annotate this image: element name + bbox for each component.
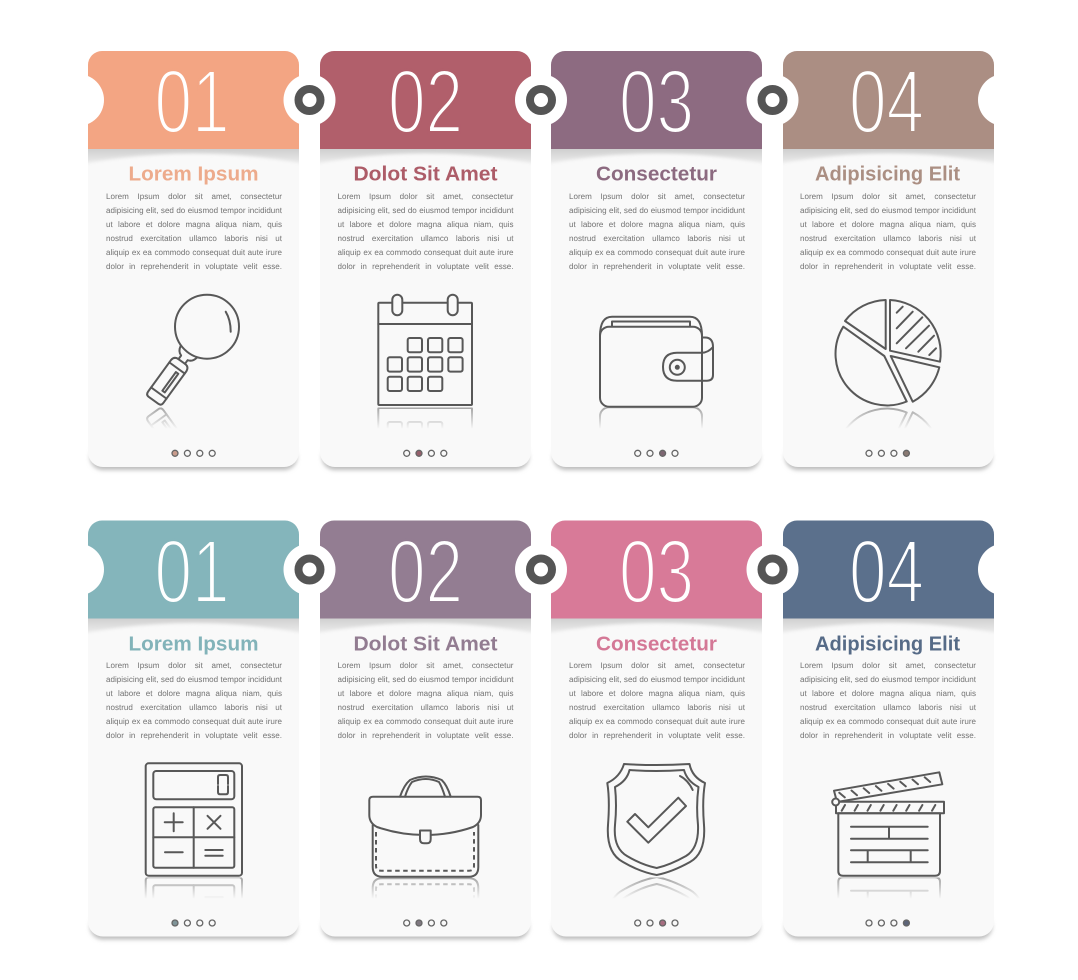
body text: dolor in reprehenderit in voluptate velit esse. bbox=[800, 731, 976, 740]
body text: adipisicing elit, sed do eiusmod tempor incididunt bbox=[106, 206, 282, 215]
icon: clapperboard bbox=[832, 772, 944, 876]
body text bbox=[106, 190, 282, 280]
body text: ut labore et dolore magna aliqua niam, quis bbox=[106, 220, 282, 229]
body text: Lorem Ipsum dolor sit amet, consectetur bbox=[338, 192, 514, 200]
header band 02 bbox=[320, 520, 531, 618]
body text: dolor in reprehenderit in voluptate velit esse. bbox=[569, 731, 745, 740]
body text: dolor in reprehenderit in voluptate velit esse. bbox=[338, 731, 514, 740]
connectors: top row rings and notches bbox=[52, 74, 1030, 126]
body text: adipisicing elit, sed do eiusmod tempor incididunt bbox=[800, 675, 976, 684]
pagination dots 03 bbox=[635, 920, 678, 926]
body text bbox=[106, 659, 282, 749]
body text: adipisicing elit, sed do eiusmod tempor incididunt bbox=[569, 206, 745, 215]
panel: card 04 Adipisicing Elit bbox=[783, 51, 994, 472]
body text bbox=[800, 190, 976, 280]
icon reflection: shield bbox=[614, 878, 698, 897]
body text: nostrud exercitation ullamco laboris nisi ut bbox=[106, 234, 282, 243]
number 02: 02 bbox=[388, 51, 463, 152]
panel: card 02 Dolot Sit Amet bbox=[320, 51, 531, 472]
body text: aliquip ex ea commodo consequat duit aute irure bbox=[800, 248, 976, 257]
connectors: bottom row rings and notches bbox=[52, 544, 1030, 596]
body text: ut labore et dolore magna aliqua niam, quis bbox=[569, 689, 745, 698]
body text: ut labore et dolore magna aliqua niam, quis bbox=[106, 689, 282, 698]
panel: card 03 Consectetur, lower row bbox=[551, 520, 762, 942]
body text: Lorem Ipsum dolor sit amet, consectetur bbox=[800, 661, 976, 670]
icon reflection: pie chart bbox=[846, 408, 931, 427]
header band 04 bbox=[783, 520, 994, 618]
heading: Adipisicing Elit: Adipisicing Elit bbox=[815, 634, 960, 656]
body text: nostrud exercitation ullamco laboris nisi ut bbox=[338, 234, 514, 243]
header band 03 bbox=[551, 520, 762, 618]
body text: dolor in reprehenderit in voluptate velit esse. bbox=[106, 731, 282, 740]
body text: dolor in reprehenderit in voluptate velit esse. bbox=[800, 262, 976, 271]
heading: Consectetur: Consectetur bbox=[596, 164, 717, 186]
body text: ut labore et dolore magna aliqua niam, quis bbox=[800, 220, 976, 229]
body text: dolor in reprehenderit in voluptate velit esse. bbox=[569, 262, 745, 271]
icon reflection: wallet bbox=[599, 408, 703, 427]
body text: ut labore et dolore magna aliqua niam, quis bbox=[338, 689, 514, 698]
body text: adipisicing elit, sed do eiusmod tempor incididunt bbox=[800, 206, 976, 215]
icon: briefcase bbox=[369, 776, 481, 877]
number 03: 03 bbox=[619, 521, 694, 622]
number 04: 04 bbox=[849, 51, 924, 152]
panel: card 03 Consectetur bbox=[551, 51, 762, 472]
body text: aliquip ex ea commodo consequat duit aute irure bbox=[106, 248, 282, 257]
number 01: 01 bbox=[154, 521, 230, 622]
body text: adipisicing elit, sed do eiusmod tempor incididunt bbox=[338, 675, 514, 684]
icon reflection: clapperboard bbox=[837, 878, 941, 897]
body text bbox=[800, 659, 976, 749]
icon reflection: briefcase bbox=[372, 878, 480, 897]
icon reflection: calendar bbox=[377, 408, 473, 427]
pagination dots 04 bbox=[866, 920, 909, 926]
body text: aliquip ex ea commodo consequat duit aute irure bbox=[569, 248, 745, 257]
panel: card 02 Dolot Sit Amet, lower row bbox=[320, 520, 531, 942]
body text: nostrud exercitation ullamco laboris nisi ut bbox=[800, 234, 976, 243]
body text: Lorem Ipsum dolor sit amet, consectetur bbox=[569, 661, 745, 670]
pagination dots 02 bbox=[404, 450, 447, 456]
body text: nostrud exercitation ullamco laboris nisi ut bbox=[106, 703, 282, 712]
body text bbox=[569, 190, 745, 280]
body text: dolor in reprehenderit in voluptate velit esse. bbox=[106, 262, 282, 271]
heading: Dolot Sit Amet: Dolot Sit Amet bbox=[354, 164, 498, 186]
header band 01 bbox=[88, 520, 299, 618]
icon reflection: calculator bbox=[144, 878, 243, 897]
pagination dots 03 bbox=[635, 450, 678, 456]
pagination dots 01 bbox=[172, 920, 215, 926]
number 04: 04 bbox=[849, 521, 924, 622]
icon: pie chart bbox=[836, 300, 941, 405]
body text: ut labore et dolore magna aliqua niam, quis bbox=[569, 220, 745, 229]
body text: ut labore et dolore magna aliqua niam, quis bbox=[338, 220, 514, 229]
number 03: 03 bbox=[619, 51, 694, 152]
number 02: 02 bbox=[388, 521, 463, 622]
body text: Lorem Ipsum dolor sit amet, consectetur bbox=[800, 192, 976, 200]
body text: dolor in reprehenderit in voluptate velit esse. bbox=[338, 262, 514, 271]
pagination dots 01 bbox=[172, 450, 215, 456]
header band 02 bbox=[320, 51, 531, 149]
body text: aliquip ex ea commodo consequat duit aute irure bbox=[338, 248, 514, 257]
body text bbox=[569, 659, 745, 749]
icon: calculator bbox=[146, 763, 242, 876]
header band 01 bbox=[88, 51, 299, 149]
body text: aliquip ex ea commodo consequat duit aute irure bbox=[106, 717, 282, 726]
body text bbox=[338, 190, 514, 280]
icon: wallet bbox=[600, 317, 713, 407]
header band 04 bbox=[783, 51, 994, 149]
header band 03 bbox=[551, 51, 762, 149]
body text: nostrud exercitation ullamco laboris nisi ut bbox=[338, 703, 514, 712]
number 01: 01 bbox=[154, 51, 230, 152]
body text: nostrud exercitation ullamco laboris nisi ut bbox=[800, 703, 976, 712]
icon: magnifying glass bbox=[145, 295, 239, 406]
body text: Lorem Ipsum dolor sit amet, consectetur bbox=[338, 661, 514, 670]
panel: card 01 Lorem Ipsum bbox=[88, 51, 299, 472]
body text: aliquip ex ea commodo consequat duit aute irure bbox=[800, 717, 976, 726]
body text: nostrud exercitation ullamco laboris nisi ut bbox=[569, 703, 745, 712]
body text: aliquip ex ea commodo consequat duit aute irure bbox=[338, 717, 514, 726]
pagination dots 04 bbox=[866, 450, 909, 456]
body text: ut labore et dolore magna aliqua niam, quis bbox=[800, 689, 976, 698]
icon: calendar bbox=[378, 295, 472, 405]
body text: aliquip ex ea commodo consequat duit aute irure bbox=[569, 717, 745, 726]
body text: Lorem Ipsum dolor sit amet, consectetur bbox=[106, 192, 282, 200]
body text: Lorem Ipsum dolor sit amet, consectetur bbox=[569, 192, 745, 200]
body text: adipisicing elit, sed do eiusmod tempor incididunt bbox=[338, 206, 514, 215]
body text: adipisicing elit, sed do eiusmod tempor incididunt bbox=[106, 675, 282, 684]
body text bbox=[338, 659, 514, 749]
heading: Lorem Ipsum: Lorem Ipsum bbox=[128, 164, 258, 186]
icon reflection: magnifying glass bbox=[146, 408, 176, 427]
panel: card 04 Adipisicing Elit, lower row bbox=[783, 520, 994, 942]
body text: nostrud exercitation ullamco laboris nisi ut bbox=[569, 234, 745, 243]
heading: Consectetur: Consectetur bbox=[596, 634, 717, 656]
icon: shield with check mark bbox=[607, 764, 705, 875]
heading: Lorem Ipsum: Lorem Ipsum bbox=[128, 634, 258, 656]
heading: Adipisicing Elit: Adipisicing Elit bbox=[815, 164, 960, 186]
body text: Lorem Ipsum dolor sit amet, consectetur bbox=[106, 661, 282, 670]
pagination dots 02 bbox=[404, 920, 447, 926]
heading: Dolot Sit Amet: Dolot Sit Amet bbox=[354, 634, 498, 656]
panel: card 01 Lorem Ipsum, lower row bbox=[88, 520, 299, 942]
body text: adipisicing elit, sed do eiusmod tempor incididunt bbox=[569, 675, 745, 684]
